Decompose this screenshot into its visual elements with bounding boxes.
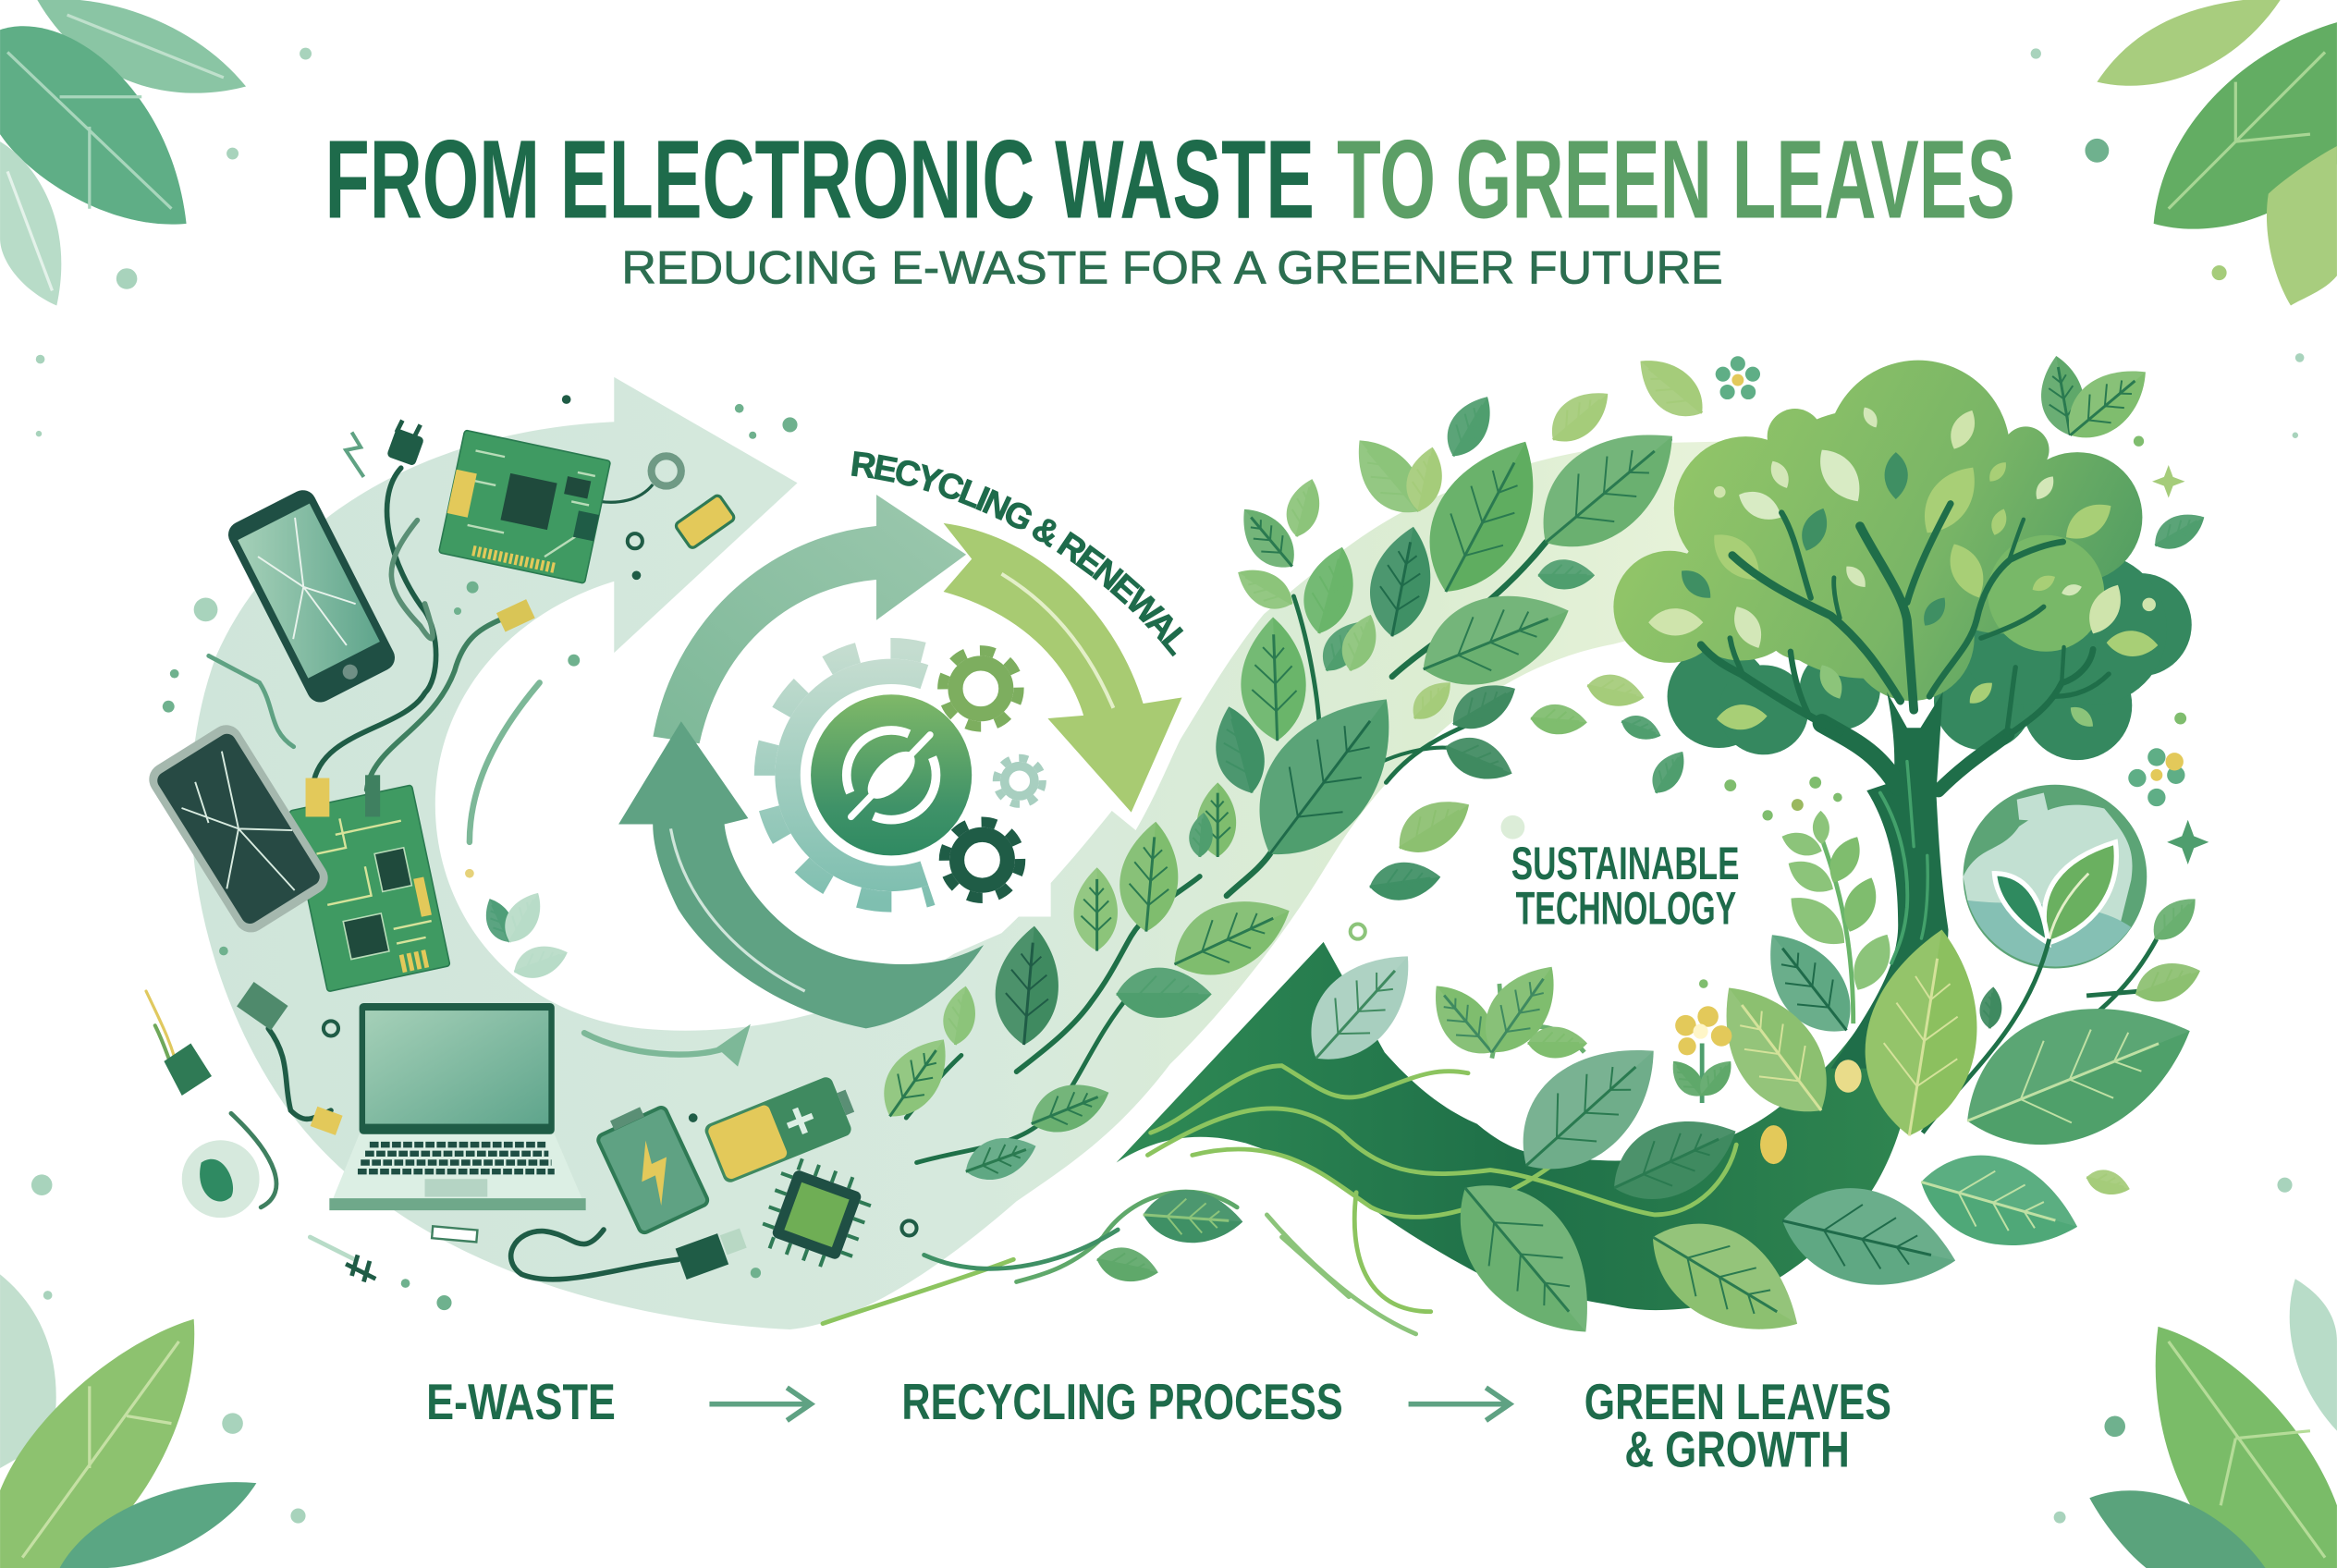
recycling arrow: top <box>652 492 969 745</box>
flowers on understory <box>1664 1006 1862 1164</box>
laptop <box>329 1003 586 1210</box>
process flow label: green leaves and growth <box>1585 1373 1891 1477</box>
infinity band arrow <box>190 377 1736 1329</box>
small gear pale <box>997 758 1043 804</box>
curved label: recycling and renewal: RECYCLING & RENEWAL <box>851 451 1183 656</box>
vine leaves <box>868 401 1698 1189</box>
swirl lines inside loop <box>470 682 745 1061</box>
arrow: e-waste to recycling <box>709 1388 811 1420</box>
process flow label: green leaves and growth: & GROWTH <box>1624 1420 1850 1477</box>
circuit board: middle <box>289 785 450 992</box>
tree trunk and branches <box>1701 504 2109 1069</box>
phone: upper cracked <box>224 485 399 707</box>
small gear light green <box>943 651 1019 727</box>
small dots around tree <box>1699 436 2186 988</box>
sprout in loop <box>465 869 572 985</box>
small gears <box>943 651 1043 898</box>
battery: yellow <box>703 1072 862 1184</box>
microchip <box>755 1154 878 1276</box>
battery: green <box>593 1097 709 1234</box>
main gear <box>765 633 1051 916</box>
small gear dark <box>944 822 1021 898</box>
cables <box>146 468 679 1280</box>
upper sprigs and floating leaves <box>1229 346 2211 904</box>
subtitle: REDUCING E-WASTE FOR A GREENER FUTURE <box>621 241 1723 293</box>
process flow label: green leaves and growth: GREEN LEAVES <box>1585 1373 1891 1430</box>
arrow: recycling to green leaves <box>1409 1388 1510 1420</box>
flower: top <box>1716 356 1760 399</box>
vine branches <box>906 440 1670 1162</box>
flower: right with sparkles <box>2128 465 2209 864</box>
circuit board: top <box>439 430 610 583</box>
process flow label: e-waste: E-WASTE <box>426 1373 616 1430</box>
fern beside trunk <box>1745 811 1901 1051</box>
corner leaves: bottom right <box>2089 1279 2337 1568</box>
icon: cable plugs <box>164 421 747 1281</box>
corner leaves: bottom left <box>0 1274 256 1568</box>
corner leaves: top right <box>2097 0 2337 305</box>
foliage on swoosh <box>1094 931 1750 1288</box>
label: sustainable technology <box>1511 838 1739 935</box>
dark green swoosh <box>1117 942 1915 1310</box>
crown dark lower lobes <box>1668 553 2192 760</box>
crown small leaves <box>1648 404 2159 731</box>
small dots around e-waste <box>163 395 798 1310</box>
recycling arrow: dark <box>618 721 984 1028</box>
crown lit patch <box>1988 535 2104 652</box>
large foliage near trunk <box>1429 888 2212 1362</box>
vines over swoosh <box>823 1066 1736 1334</box>
label: sustainable technology: TECHNOLOGY <box>1516 883 1736 935</box>
process flow label: recycling process: RECYCLING PROCESS <box>901 1373 1343 1430</box>
label: sustainable technology: SUSTAINABLE <box>1511 838 1739 889</box>
title: FROM ELECTRONIC WASTE <box>325 116 1315 241</box>
corner leaves: top left <box>0 0 246 305</box>
connectors on middle board <box>306 775 380 816</box>
recycling arrow: light green <box>944 523 1182 813</box>
small rings <box>324 533 1365 1235</box>
globe with seedling <box>1964 785 2147 969</box>
tree crown <box>1613 361 2192 760</box>
phone: lower cracked <box>143 719 334 938</box>
crown light upper mass <box>1613 361 2142 701</box>
